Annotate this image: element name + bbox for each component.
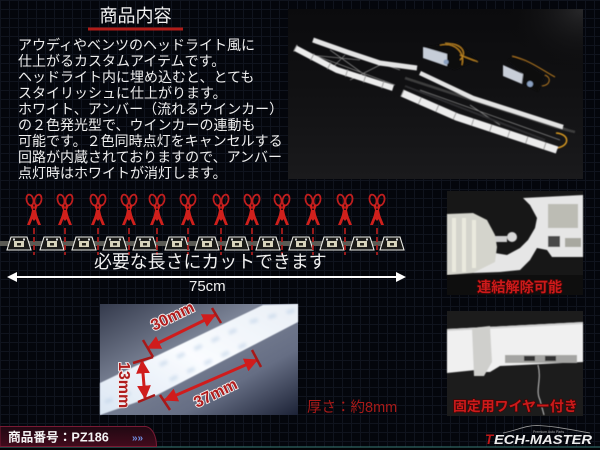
dimension: 30mm — [143, 299, 221, 357]
dimension: 37mm: 37mm — [191, 376, 240, 412]
detail photo: fixing wire — [447, 311, 583, 416]
brand logo — [485, 426, 593, 447]
description text block: ヘッドライト内に埋め込むと、とても — [18, 69, 254, 85]
description text block: 可能です。２色同時点灯をキャンセルする — [18, 133, 283, 149]
description text block — [18, 37, 283, 181]
dimension: 37mm — [160, 350, 261, 412]
description text block: 回路が内蔵されておりますので、アンバー — [18, 149, 282, 165]
dimension: 13mm: 13mm — [115, 362, 132, 408]
description text block: ホワイト、アンバー（流れるウインカー） — [18, 101, 283, 117]
brand logo: T — [485, 432, 495, 447]
description text block: スタイリッシュに仕上がります。 — [18, 85, 227, 101]
description text block: 点灯時はホワイトが消灯します。 — [18, 165, 227, 181]
description text block: アウディやベンツのヘッドライト風に — [18, 37, 255, 53]
thickness label: 厚さ：約8mm — [307, 399, 397, 416]
cut caption: 必要な長さにカットできます — [94, 252, 327, 272]
length label: 75cm — [189, 278, 226, 295]
footer bar — [0, 426, 600, 450]
dimension: 13mm — [115, 357, 155, 408]
caption: 固定用ワイヤー付き — [453, 398, 578, 414]
detail photo: connector — [447, 191, 583, 296]
title: 商品内容 — [100, 6, 172, 26]
LED strip segments — [0, 237, 404, 250]
dimension: 30mm: 30mm — [148, 299, 197, 335]
dimension photo — [100, 299, 298, 415]
product number tab: 商品番号：PZ186 — [8, 430, 109, 444]
product number tab: »» — [132, 433, 144, 444]
product photo — [288, 9, 583, 179]
scissors row — [25, 194, 386, 255]
length arrow — [7, 272, 406, 282]
description text block: の２色発光型で、ウインカーの連動も — [18, 117, 255, 133]
brand logo: Premium Auto Parts — [533, 430, 564, 434]
product number tab — [0, 426, 156, 446]
description text block: 仕上がるカスタムアイテムです。 — [18, 53, 225, 69]
caption: 連結解除可能 — [477, 279, 562, 296]
brand logo: ECH-MASTER — [494, 432, 593, 447]
title — [88, 6, 183, 30]
